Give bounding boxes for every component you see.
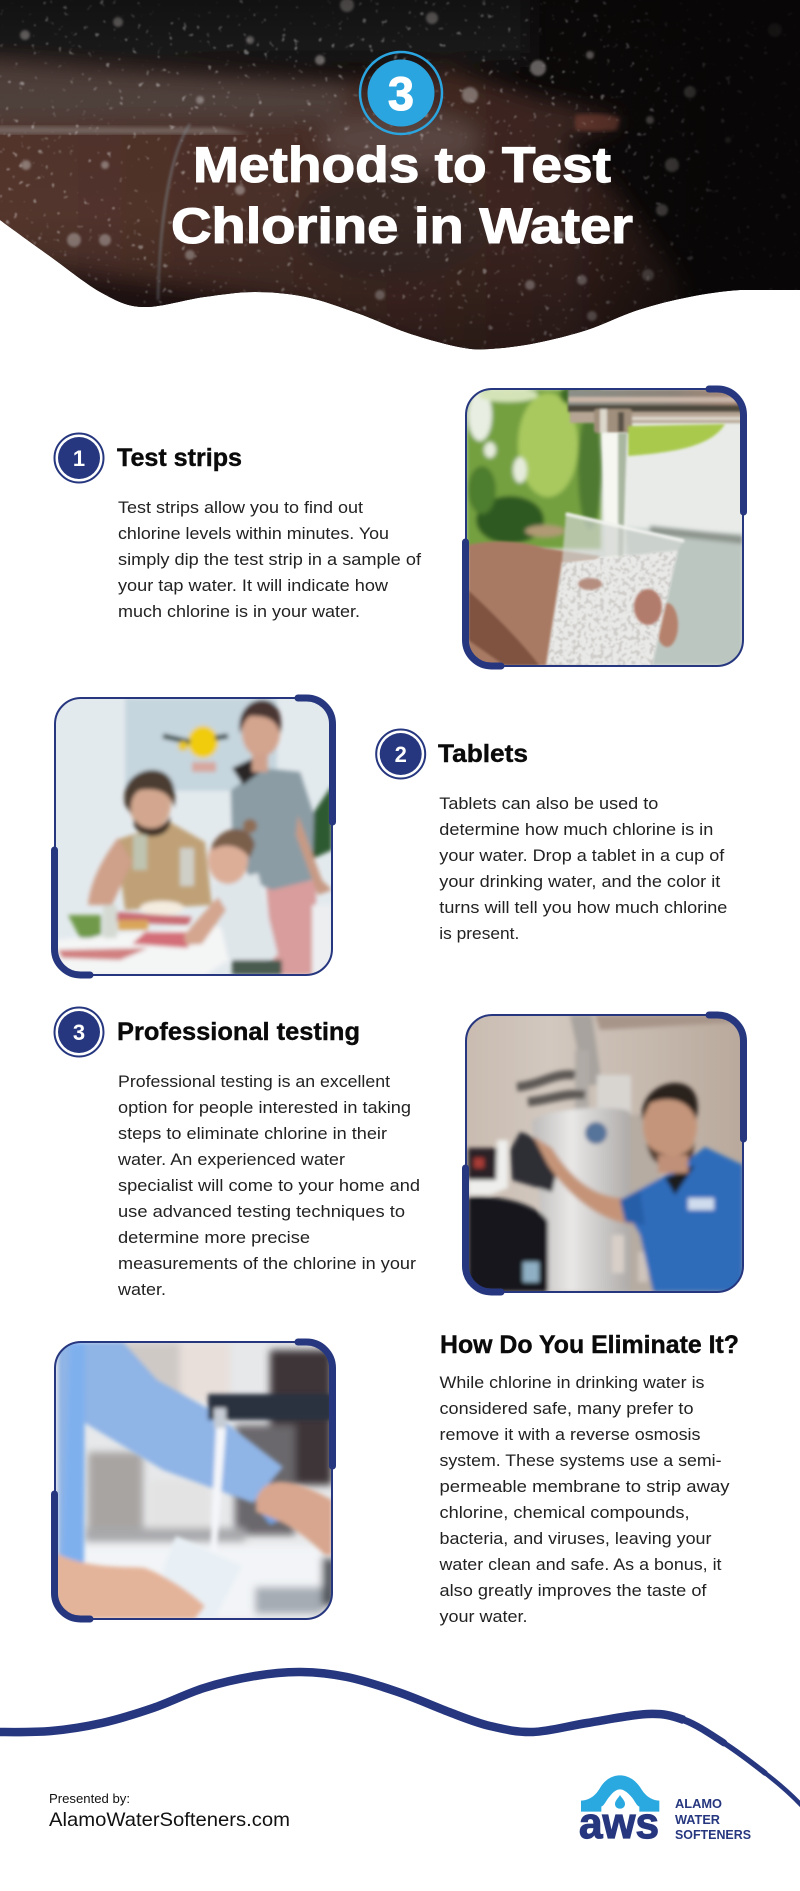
text block: tablets: your water. Drop a tablet in a cup of [439,847,725,865]
plant [310,785,332,860]
text block: test strips: much chlorine is in your water. [118,603,360,621]
heading: how do you eliminate it: How Do You Eliminate It? [440,1331,739,1359]
man [88,770,212,910]
shirt [620,1147,743,1292]
badge: number 3 [360,52,442,134]
badge: number 3: 3 [388,67,414,120]
water stream [210,1428,226,1560]
text block: how do you eliminate it: water clean and safe. As a bonus, it [438,1556,722,1574]
text block: professional testing: steps to eliminate chlorine in their [118,1125,388,1143]
hero photo banner [0,0,800,380]
text block: test strips: chlorine levels within minutes. You [118,525,389,543]
head [643,1090,697,1160]
heading: test strips: Test strips [117,444,242,472]
text block: test strips: simply dip the test strip in a sample of [118,551,421,569]
text block: tablets: Tablets can also be used to [439,795,658,813]
text block: how do you eliminate it: While chlorine in drinking water is [440,1374,704,1392]
panel: method 1 test strips [54,434,421,621]
pipes [517,1075,585,1102]
text block: professional testing: option for people interested in taking [118,1099,411,1117]
text block: test strips: Test strips allow you to find out [118,499,363,517]
softener tank [468,1197,548,1292]
text block: tablets [439,795,727,943]
panel: how do you eliminate it [438,1331,739,1626]
text block: tablets: is present. [439,925,519,943]
text block: how do you eliminate it: bacteria, and viruses, leaving your [440,1530,712,1548]
control head [510,1132,556,1192]
heading: tablets: Tablets [438,740,528,768]
footer wave line [0,1672,800,1807]
text block: professional testing: water. An experienced water [117,1151,346,1169]
text block: professional testing: Professional testing is an excellent [118,1073,390,1091]
footer: presented by [49,1791,290,1831]
panel: method 2 tablets [376,730,727,943]
text block: tablets: determine how much chlorine is in [439,821,713,839]
title: Methods to Test [193,137,611,193]
text block: how do you eliminate it [438,1374,730,1626]
girl [184,819,282,975]
text block: how do you eliminate it: considered safe, many prefer to [440,1400,694,1418]
text block: professional testing: use advanced testing techniques to [118,1203,405,1221]
number badge 1: 1 [73,446,85,471]
glass of water [540,513,685,670]
number badge 3: 3 [73,1020,85,1045]
number badge 3 [54,1008,104,1056]
text block: how do you eliminate it: system. These systems use a semi- [440,1452,722,1470]
logo company name: ALAMO [675,1797,722,1811]
text block: professional testing: measurements of the chlorine in your [118,1255,417,1273]
faucet [568,389,743,433]
text block: how do you eliminate it: permeable membrane to strip away [440,1478,730,1496]
water stream [602,433,627,565]
text block: test strips [118,499,421,621]
water heater [532,1108,630,1292]
photo: filling a glass at a filtered tap [54,1342,334,1619]
logo company name [675,1797,751,1842]
logo wordmark aws: aws [579,1799,659,1848]
table and dishes [58,898,228,974]
text block: how do you eliminate it: also greatly improves the taste of [440,1582,707,1600]
right hand [256,1482,332,1555]
text block: how do you eliminate it: chlorine, chemical compounds, [440,1504,690,1522]
hand [468,542,678,666]
photo: water filling a glass from a tap [465,386,744,670]
title [171,137,633,254]
logo: alamo water softeners [579,1775,751,1848]
footer: presented by: AlamoWaterSofteners.com [49,1809,290,1831]
number badge 2: 2 [395,742,407,767]
heading: professional testing: Professional testing [117,1018,360,1046]
text block: how do you eliminate it: your water. [440,1608,528,1626]
logo arch and water drop [581,1775,659,1812]
logo company name: WATER [675,1813,720,1827]
sleeve [58,1342,283,1570]
text block: professional testing [117,1073,420,1299]
text block: professional testing: specialist will come to your home and [118,1177,420,1195]
text block: test strips: your tap water. It will indicate how [118,577,388,595]
glass [166,1534,238,1614]
logo company name: SOFTENERS [675,1828,751,1842]
text block: how do you eliminate it: remove it with a reverse osmosis [440,1426,700,1444]
text block: professional testing: determine more precise [118,1229,310,1247]
left hand [55,1553,205,1619]
painting [125,698,277,791]
text block: tablets: turns will tell you how much chlorine [439,899,727,917]
footer: presented by: Presented by: [49,1791,130,1806]
woman [231,700,332,975]
panel: method 3 professional testing [54,1008,420,1299]
title: Chlorine in Water [171,198,633,254]
faucet [208,1394,332,1420]
text block: professional testing: water. [117,1281,166,1299]
number badge 1 [54,434,104,482]
arm [533,1136,640,1225]
photo: technician beside a water softener [466,1015,744,1292]
text block: tablets: your drinking water, and the color it [439,873,721,891]
photo: family at a table with water glasses [54,698,332,975]
number badge 2 [376,730,425,778]
